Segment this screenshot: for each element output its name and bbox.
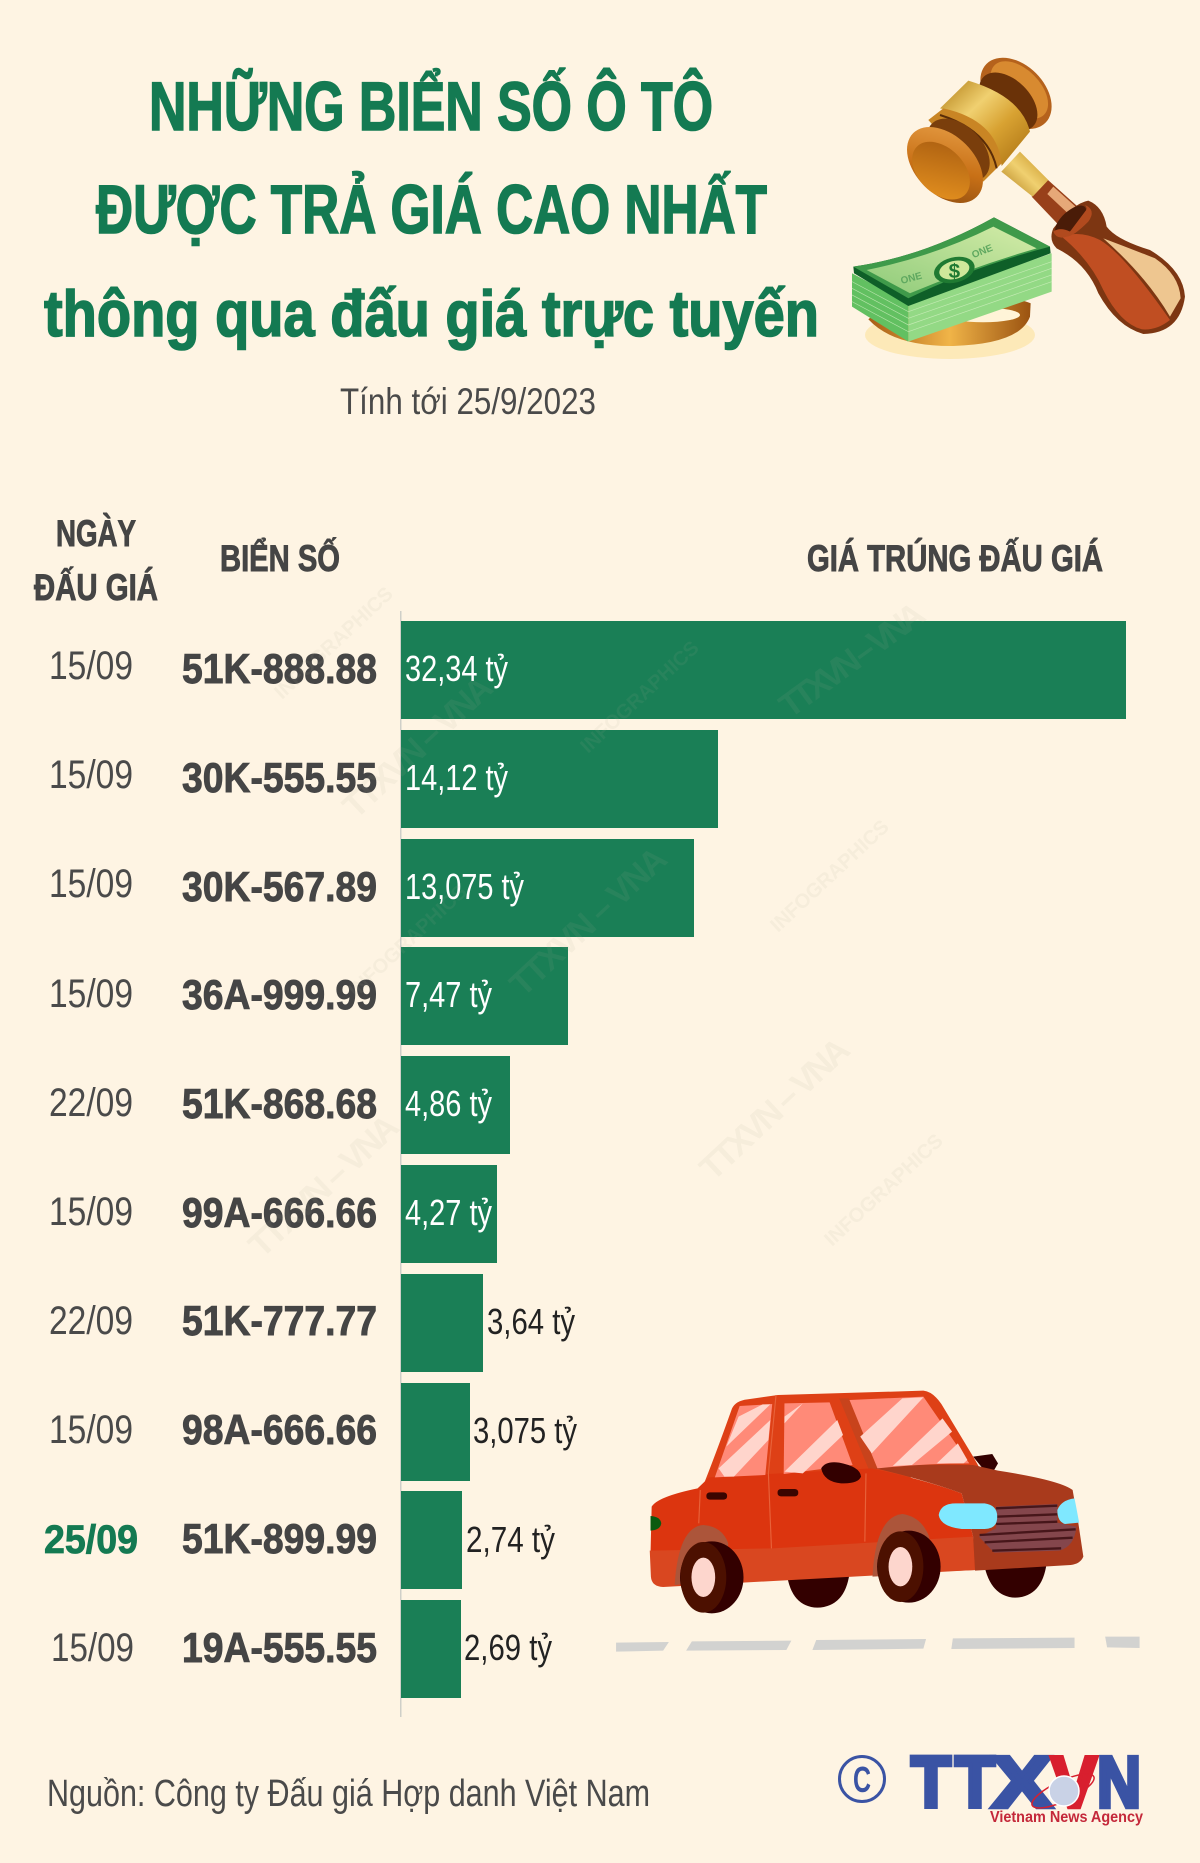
glow under base	[865, 311, 1035, 359]
row: 30K-567.89: 30K-567.89	[182, 863, 377, 910]
car hood and front	[876, 1465, 1083, 1571]
wordmark	[911, 1743, 1141, 1823]
watermarks: TTXVN – VNA	[503, 840, 675, 1004]
watermarks: INFOGRAPHICS	[820, 1130, 948, 1251]
row: 51K-777.77: 3,64 tỷ	[487, 1301, 575, 1342]
logo: TTXVN	[840, 1743, 1143, 1826]
title: ĐƯỢC TRẢ GIÁ CAO NHẤT	[96, 171, 767, 248]
row: 36A-999.99: 7,47 tỷ	[405, 974, 492, 1015]
row: 51K-888.88: 51K-888.88	[182, 645, 377, 692]
row: 30K-555.55: 14,12 tỷ	[405, 757, 508, 798]
far mirror	[973, 1454, 998, 1470]
row: 51K-899.99: 25/09	[44, 1518, 138, 1562]
gavel collar	[1001, 152, 1048, 197]
row: 51K-888.88: 32,34 tỷ	[405, 648, 508, 689]
front side window	[784, 1402, 853, 1474]
gavel near cap	[892, 112, 998, 218]
wheel arches	[675, 1525, 728, 1585]
icon: gavel and money	[852, 44, 1185, 359]
row: 19A-555.55: 2,69 tỷ	[464, 1627, 552, 1668]
row: 36A-999.99: 15/09	[49, 972, 133, 1016]
gavel base	[868, 296, 1031, 346]
car lower band	[650, 1537, 975, 1587]
row: 51K-868.68	[49, 1056, 510, 1154]
column headers: NGÀY	[56, 513, 136, 554]
far wheels	[787, 1573, 850, 1608]
row: 19A-555.55: 15/09	[51, 1626, 134, 1670]
row: 98A-666.66: 15/09	[49, 1408, 133, 1452]
watermarks: INFOGRAPHICS	[576, 637, 704, 758]
wordmark: V	[1051, 1743, 1097, 1823]
title: NHỮNG BIỂN SỐ Ô TÔ	[149, 68, 713, 145]
watermarks: TTXVN – VNA	[242, 1107, 406, 1265]
row: 51K-888.88: 15/09	[49, 644, 133, 688]
title: thông qua đấu giá trực tuyến	[44, 277, 819, 350]
row: 51K-777.77	[49, 1274, 575, 1372]
headlights	[939, 1503, 997, 1529]
column headers	[34, 513, 1103, 608]
row: 51K-899.99: 2,74 tỷ	[466, 1519, 555, 1560]
row: 98A-666.66: 98A-666.66	[182, 1406, 377, 1453]
road dashes	[616, 1637, 1140, 1652]
watermarks: INFOGRAPHICS	[766, 816, 894, 937]
row: 19A-555.55: 19A-555.55	[182, 1624, 377, 1671]
wordmark: X	[992, 1743, 1052, 1823]
copyright mark: C	[853, 1759, 871, 1800]
title	[44, 68, 819, 350]
watermarks: INFOGRAPHICS	[344, 881, 472, 1002]
gavel rings	[928, 108, 1002, 182]
row: 51K-777.77: 22/09	[49, 1299, 133, 1343]
source note: Nguồn: Công ty Đấu giá Hợp danh Việt Nam	[47, 1773, 650, 1815]
icon: gavel and money: $	[949, 260, 961, 283]
watermarks	[242, 583, 948, 1265]
row: 51K-899.99	[44, 1491, 555, 1589]
watermarks: TTXVN – VNA	[693, 1030, 857, 1188]
icon: gavel and money: ONE	[900, 271, 924, 287]
grille	[979, 1504, 1076, 1553]
front near wheel	[877, 1531, 941, 1603]
subtitle: date: Tính tới 25/9/2023	[340, 381, 596, 422]
money stack	[852, 273, 908, 342]
watermarks: INFOGRAPHICS	[270, 583, 398, 704]
row: 36A-999.99	[49, 947, 568, 1045]
gavel handle grip	[1051, 201, 1185, 334]
column axis	[400, 611, 402, 1717]
row: 99A-666.66: 99A-666.66	[182, 1189, 377, 1236]
row: 99A-666.66: 15/09	[49, 1190, 133, 1234]
row: 98A-666.66	[49, 1383, 577, 1481]
row: 51K-868.68: 51K-868.68	[182, 1080, 377, 1127]
illustration: red car on road	[616, 1391, 1140, 1652]
watermarks: TTXVN – VNA	[336, 668, 500, 826]
windshield	[850, 1397, 969, 1468]
column headers: ĐẤU GIÁ	[34, 567, 158, 608]
car cabin	[701, 1391, 983, 1497]
row: 36A-999.99: 36A-999.99	[182, 971, 377, 1018]
tail light	[651, 1516, 661, 1531]
wordmark: T	[911, 1743, 951, 1823]
row: 98A-666.66: 3,075 tỷ	[473, 1410, 577, 1451]
gavel handle shaft	[1032, 179, 1083, 233]
row: 30K-567.89	[49, 839, 694, 937]
row: 30K-555.55: 30K-555.55	[182, 754, 377, 801]
row: 30K-555.55	[49, 730, 718, 828]
near mirror	[821, 1462, 861, 1483]
wordmark: N	[1097, 1743, 1141, 1823]
row: 19A-555.55	[51, 1600, 552, 1698]
rear window	[715, 1404, 772, 1477]
row: 51K-777.77: 51K-777.77	[182, 1297, 377, 1344]
column headers: GIÁ TRÚNG ĐẤU GIÁ	[807, 537, 1103, 579]
row: 51K-899.99: 51K-899.99	[182, 1515, 377, 1562]
copyright mark	[840, 1756, 884, 1802]
rear near wheel	[680, 1541, 744, 1613]
gavel gold body	[940, 81, 1030, 166]
icon: gavel and money: ONE	[970, 243, 995, 261]
door lines and handles	[699, 1395, 866, 1548]
row: 51K-868.68: 22/09	[49, 1081, 133, 1125]
agency name: Vietnam News Agency	[990, 1809, 1143, 1826]
row: 51K-868.68: 4,86 tỷ	[405, 1083, 492, 1124]
row: 99A-666.66: 4,27 tỷ	[405, 1192, 492, 1233]
row: 51K-888.88	[49, 621, 1126, 719]
watermarks: TTXVN – VNA	[772, 595, 932, 725]
globe	[1028, 1768, 1098, 1814]
row: 30K-567.89: 13,075 tỷ	[405, 866, 524, 907]
wordmark: T	[955, 1743, 995, 1823]
row: 99A-666.66	[49, 1165, 497, 1263]
row: 30K-567.89: 15/09	[49, 862, 133, 906]
car body	[651, 1468, 977, 1580]
gavel far cap	[966, 44, 1065, 143]
row: 30K-555.55: 15/09	[49, 753, 133, 797]
column headers: BIỂN SỐ	[220, 537, 340, 579]
